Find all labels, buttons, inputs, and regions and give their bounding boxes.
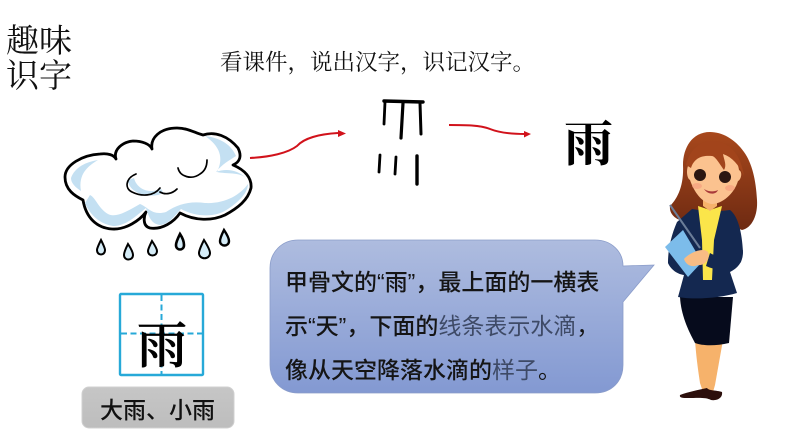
arrow: oracle glyph to modern character: [449, 125, 531, 138]
instruction text: 看课件，说出汉字，识记汉字。: [220, 45, 535, 77]
teacher jacket: [668, 209, 743, 298]
teacher hands: [684, 250, 709, 266]
bubble text: [285, 263, 599, 385]
teacher sleeve: [706, 250, 743, 269]
title: 趣味识字: 趣味: [6, 24, 72, 60]
button text: 大雨、小雨: [100, 391, 215, 425]
grid character 雨: 雨: [137, 306, 187, 378]
teacher skirt: [680, 297, 733, 345]
gray word button: [82, 387, 234, 428]
icon: rain cloud: [65, 128, 251, 260]
teacher eyes: [694, 169, 731, 183]
icon: oracle bone glyph for rain: [379, 101, 423, 184]
teacher hair: [670, 132, 757, 230]
teacher blush: [692, 183, 735, 191]
teacher face: [687, 151, 741, 204]
teacher book: [665, 230, 702, 277]
bubble text: 像从天空降落水滴的样子。: [285, 351, 561, 385]
title: 趣味识字: [6, 24, 72, 95]
bubble text: 甲骨文的“雨”，最上面的一横表: [285, 263, 599, 297]
arrow: cloud to oracle glyph: [250, 130, 346, 158]
speech bubble: [270, 240, 654, 393]
bubble text: 示“天”，下面的线条表示水滴，: [285, 307, 599, 341]
modern character 雨: 雨: [564, 106, 613, 176]
title: 趣味识字: 识字: [6, 59, 72, 95]
writing grid: [120, 294, 203, 375]
teacher mouth: [704, 189, 718, 194]
icon: rain drops: [97, 230, 229, 260]
teacher neck: [703, 198, 717, 211]
teacher fringe: [686, 141, 744, 176]
teacher pointer: [670, 205, 700, 248]
illustration: teacher: [665, 132, 757, 400]
teacher shoes: [680, 388, 722, 400]
teacher blouse: [698, 206, 722, 280]
teacher legs: [695, 340, 723, 392]
